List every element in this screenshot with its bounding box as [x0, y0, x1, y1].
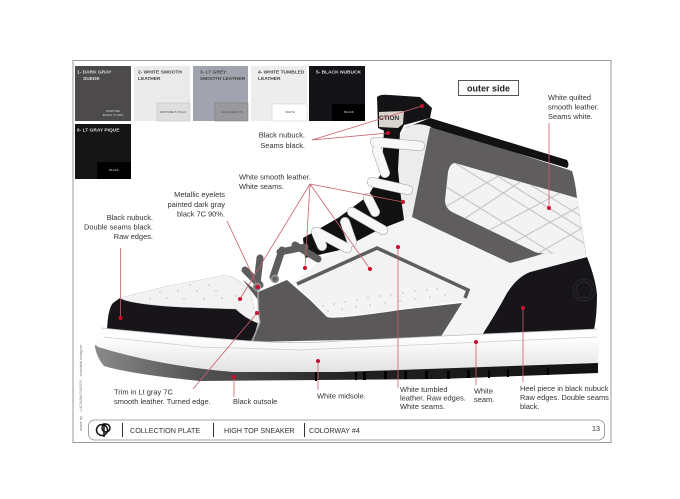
callout: black nubuck seams black: Seams black.: [260, 141, 305, 150]
swatch 1: dark gray suede: SUEDE: [83, 76, 100, 82]
trim light gray: [252, 292, 260, 342]
swatch 5: black nubuck: BLACK: [344, 110, 354, 114]
callout: white quilted smooth leather: [547, 93, 599, 210]
midsole seam: [104, 337, 597, 350]
tongue label: [379, 111, 404, 128]
callout: heel piece: [520, 306, 609, 411]
swatch 1: dark gray suede: BLACK 7C 90%: [103, 113, 124, 117]
swatch 6: light gray pique: [75, 124, 131, 179]
tongue label: CTION: [379, 115, 400, 122]
midsole: [95, 328, 600, 372]
callout: trim: Trim in Lt gray 7C: [114, 388, 173, 396]
callout: black nubuck toe: Raw edges.: [114, 232, 153, 241]
swatch 2: white smooth leather: [134, 66, 190, 121]
callout: trim: [114, 311, 259, 406]
swatch 6: light gray pique: 6- LT GRAY PIQUE: [77, 128, 120, 134]
callout: white tumbled leather: leather. Raw edges.: [400, 394, 466, 402]
swatch 4: white tumbled leather: 4- WHITE TUMBLED: [258, 70, 305, 76]
callout: white midsole: [316, 359, 366, 400]
heel piece: [482, 257, 597, 335]
callout: white smooth leather: White seams.: [239, 182, 284, 191]
callout: black nubuck toe: Black nubuck.: [107, 213, 153, 222]
callout: white tumbled leather: White tumbled: [400, 385, 448, 394]
callout: white tumbled leather: White seams.: [400, 402, 445, 411]
footer labels: 13: [592, 424, 600, 433]
swatch 2: white smooth leather: LEATHER: [138, 76, 161, 82]
tongue: [377, 95, 432, 137]
callout: white quilted smooth leather: Seams white.: [548, 112, 593, 121]
white laces: [316, 142, 420, 248]
swatch 3: light grey smooth leather: 3- LT GREY: [200, 70, 227, 76]
callout: black nubuck seams black: [259, 104, 424, 150]
callout: black outsole: [232, 375, 277, 406]
swatch 6: light gray pique: BLACK: [109, 168, 119, 172]
black lace underlay: [303, 128, 404, 258]
callout: heel piece: black.: [520, 402, 539, 411]
swatch 3: light grey smooth leather: [193, 66, 248, 121]
callout: white midsole: White midsole.: [317, 392, 366, 400]
swatch 1: dark gray suede: [75, 66, 131, 121]
collar white: [382, 123, 433, 222]
callout: white seam: seam.: [474, 395, 494, 404]
callout: white smooth leather: [238, 172, 405, 301]
footer bar: [88, 420, 604, 440]
callout: heel piece: Raw edges. Double seams: [520, 393, 609, 402]
toe perforations: [149, 284, 237, 300]
outsole: [95, 345, 598, 381]
callout: white smooth leather: White smooth leather.: [239, 172, 311, 182]
swatch 2: white smooth leather: 2- WHITE SMOOTH: [138, 70, 182, 76]
side stripe: [297, 248, 468, 298]
heel logo: [573, 279, 595, 301]
gray laces and eyelets: [245, 245, 318, 290]
swatch 3: light grey smooth leather: SMOOTH LEATHER: [200, 76, 246, 82]
view label: outer side: [458, 80, 518, 96]
sneaker illustration: [95, 95, 600, 381]
black tread marks: [315, 368, 549, 381]
white smooth mid panel: [297, 250, 466, 316]
callout: trim: smooth leather. Turned edge.: [114, 397, 211, 406]
swatch 1: dark gray suede: PANTONE: [106, 109, 120, 113]
footer labels: HIGH TOP SNEAKER: [224, 426, 295, 435]
callout: heel piece: Heel piece in black nubuck: [520, 384, 609, 393]
callout: white tumbled leather: [396, 245, 466, 411]
gray suede quarter: [243, 280, 462, 342]
callout: metallic eyelets: Metallic eyelets: [174, 190, 225, 199]
footer labels: COLLECTION PLATE: [130, 426, 200, 435]
mid panel perforations: [322, 288, 446, 312]
swatch 4: white tumbled leather: WHITE: [285, 110, 295, 114]
white tumbled leather: [293, 217, 587, 338]
swatch 5: black nubuck: [309, 66, 365, 121]
icon: CP logo: [96, 423, 110, 437]
swatch 3: light grey smooth leather: COOL GRAY 7C: [221, 110, 243, 114]
callout: white quilted smooth leather: smooth leather.: [548, 102, 599, 112]
quilted white panel: [445, 163, 586, 254]
swatch 4: white tumbled leather: [251, 66, 307, 121]
black collar lining: [400, 118, 568, 168]
callout: metallic eyelets: [168, 190, 260, 289]
callout: white seam: [474, 340, 494, 404]
callout: white quilted smooth leather: White quilted: [548, 93, 591, 102]
toe white leather: [120, 276, 258, 323]
callout: black nubuck seams black: Black nubuck.: [259, 130, 305, 140]
footer labels: COLORWAY #4: [309, 426, 360, 435]
collection plate: [72, 60, 612, 443]
callout: black nubuck toe: Double seams black.: [84, 222, 153, 232]
callout: metallic eyelets: black 7C 90%.: [177, 210, 225, 218]
swatch 2: white smooth leather: PANTONE P 179-1C: [160, 110, 186, 114]
gray suede collar panel: [412, 126, 586, 263]
view label: outer side: outer side: [467, 83, 510, 93]
designer credit: made by LUCIANA FIARDY - industrial designer: [78, 344, 83, 431]
page frame: [73, 60, 611, 442]
callout: metallic eyelets: painted dark gray: [168, 200, 225, 209]
callout: black nubuck toe: [84, 213, 153, 320]
callout: white seam: White: [474, 386, 493, 396]
footer labels: [130, 424, 600, 435]
callout: black outsole: Black outsole: [233, 397, 277, 406]
toe cap black nubuck: [107, 298, 258, 342]
swatch 1: dark gray suede: 1- DARK GRAY: [77, 70, 112, 76]
swatch 5: black nubuck: 5- BLACK NUBUCK: [316, 70, 361, 76]
swatch 4: white tumbled leather: LEATHER: [258, 76, 281, 82]
